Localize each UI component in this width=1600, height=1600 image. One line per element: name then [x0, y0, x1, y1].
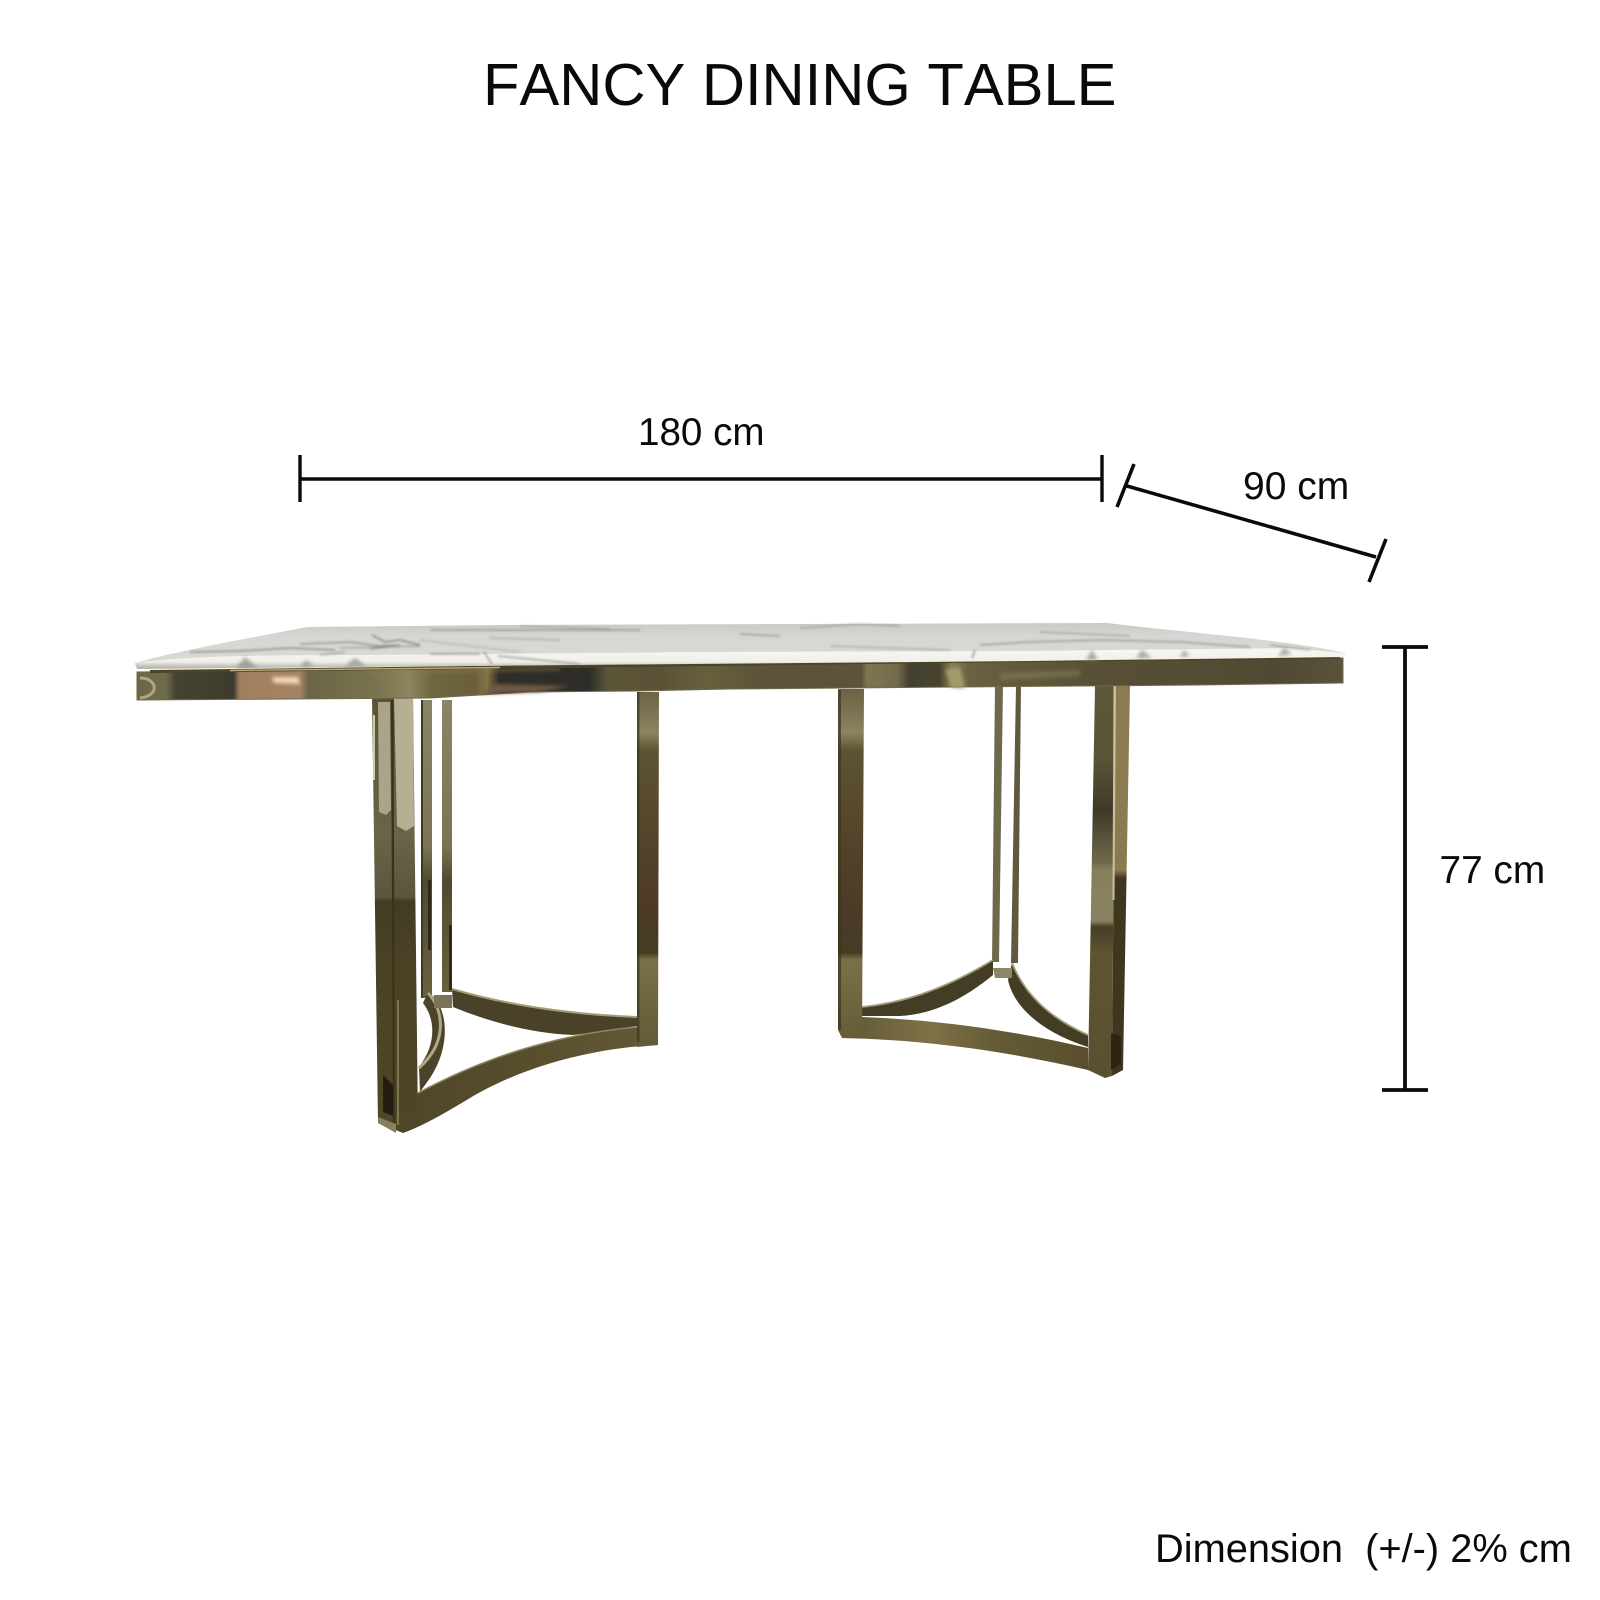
dimension: width 180 cm — [300, 411, 1102, 502]
marble front edge — [135, 648, 1345, 669]
marble top surface — [135, 623, 1345, 665]
left upright — [838, 689, 864, 1038]
tolerance note: Dimension (+/-) 2% cm — [1155, 1527, 1572, 1571]
marble edge mottling — [236, 648, 1292, 668]
rear arcs and connector — [862, 960, 1088, 1047]
main front upright — [372, 696, 418, 1133]
dimension: height 77 cm — [1382, 647, 1545, 1090]
dimension: height 77 cm: 77 cm — [1440, 849, 1545, 892]
left leg frame — [372, 692, 659, 1133]
rear thin bars — [421, 700, 452, 998]
dimension: width 180 cm: 180 cm — [638, 411, 765, 454]
leg highlights — [373, 698, 414, 1125]
marble table top — [135, 623, 1345, 669]
dimension: depth 90 cm — [1117, 464, 1386, 582]
rear thin bars — [992, 685, 1021, 963]
dimension: depth 90 cm: 90 cm — [1243, 465, 1349, 508]
main right upright — [1088, 686, 1130, 1078]
front right upright — [637, 692, 659, 1047]
apron frame — [137, 656, 1343, 700]
long curved base bar — [842, 1017, 1088, 1070]
apron reflections — [272, 667, 1080, 694]
marble veins — [190, 624, 1310, 664]
table illustration — [135, 623, 1345, 1133]
right leg frame — [838, 685, 1130, 1078]
title: FANCY DINING TABLE — [483, 51, 1116, 118]
rear arc and connector — [419, 989, 637, 1092]
long curved base bar — [403, 1020, 658, 1133]
